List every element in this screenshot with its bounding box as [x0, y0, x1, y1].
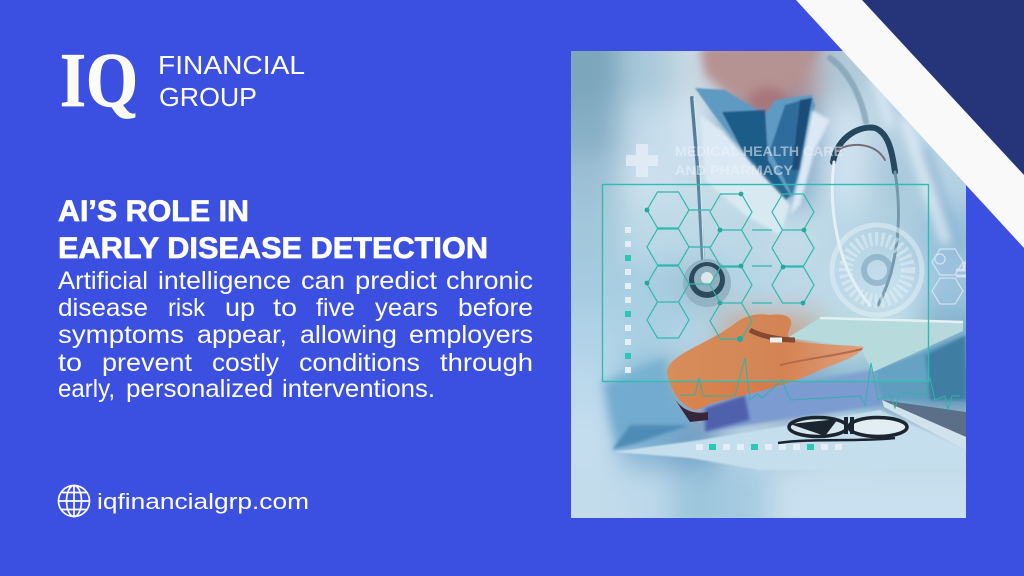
photo tonal base	[571, 51, 966, 518]
logo wordmark: FINANCIAL	[158, 50, 305, 80]
left sleeve	[603, 357, 694, 450]
body text: risk	[168, 294, 205, 322]
logo wordmark	[158, 50, 305, 112]
body text: Artificial	[58, 267, 148, 295]
HUD ECG line	[680, 358, 960, 410]
body text: interventions.	[282, 375, 435, 403]
body text: five	[316, 294, 355, 322]
body text: early,	[58, 375, 115, 403]
HUD hexagon network	[647, 192, 814, 339]
HUD frame	[602, 184, 928, 382]
body text: years	[375, 294, 438, 322]
logo	[60, 37, 305, 123]
neck	[700, 45, 822, 113]
coat folds	[875, 75, 960, 250]
body text: personalized	[126, 375, 273, 403]
shirt and tie	[695, 88, 815, 200]
HUD caption: AND PHARMACY	[675, 162, 794, 178]
body text: can	[301, 267, 345, 295]
body text: symptoms	[58, 321, 184, 349]
icon: globe	[58, 486, 90, 516]
body text: to	[58, 349, 82, 377]
logo mark IQ: IQ	[60, 37, 138, 123]
body text: conditions	[299, 349, 420, 377]
HUD left squares	[625, 227, 631, 373]
body text: disease	[58, 294, 148, 322]
laptop	[882, 400, 966, 450]
corner: white diagonal band	[796, 0, 1024, 248]
HUD nodes	[645, 192, 806, 342]
HUD small icons	[932, 249, 970, 304]
logo wordmark: GROUP	[159, 82, 257, 112]
HUD caption	[676, 146, 842, 175]
body text: predict	[355, 267, 437, 295]
coat lapel highlights	[700, 110, 830, 235]
heading	[58, 195, 488, 265]
HUD cross icon	[626, 144, 658, 177]
HUD caption: MEDICAL HEALTH CARE	[675, 143, 843, 159]
body text: employers	[409, 321, 533, 349]
body text: prevent	[102, 349, 192, 377]
body text: before	[458, 294, 533, 322]
photo: doctor with tablet and medical HUD	[571, 51, 966, 518]
HUD bottom squares	[696, 444, 842, 450]
body text: to	[273, 294, 297, 322]
heading: EARLY DISEASE DETECTION	[58, 232, 488, 265]
stethoscope chest piece	[683, 259, 731, 307]
body text: appear,	[197, 321, 287, 349]
body text: through	[440, 349, 533, 377]
right sleeve	[873, 335, 966, 400]
glasses	[778, 417, 907, 443]
body text: chronic	[446, 267, 533, 295]
heading: AI’S ROLE IN	[58, 195, 249, 228]
stethoscope	[692, 58, 898, 305]
body text: allowing	[300, 321, 397, 349]
hand	[667, 314, 864, 410]
body text: up	[225, 294, 255, 322]
table	[613, 410, 966, 470]
tablet	[787, 318, 963, 372]
website: iqfinancialgrp.com	[97, 489, 309, 514]
torso below hand	[700, 370, 885, 432]
HUD circular gauge	[832, 225, 922, 315]
cuff shadow	[672, 395, 708, 422]
body text: intelligence	[158, 267, 291, 295]
body text	[58, 267, 533, 403]
cuff	[612, 425, 690, 450]
corner: navy triangle	[862, 0, 1024, 175]
body text: costly	[212, 349, 280, 377]
